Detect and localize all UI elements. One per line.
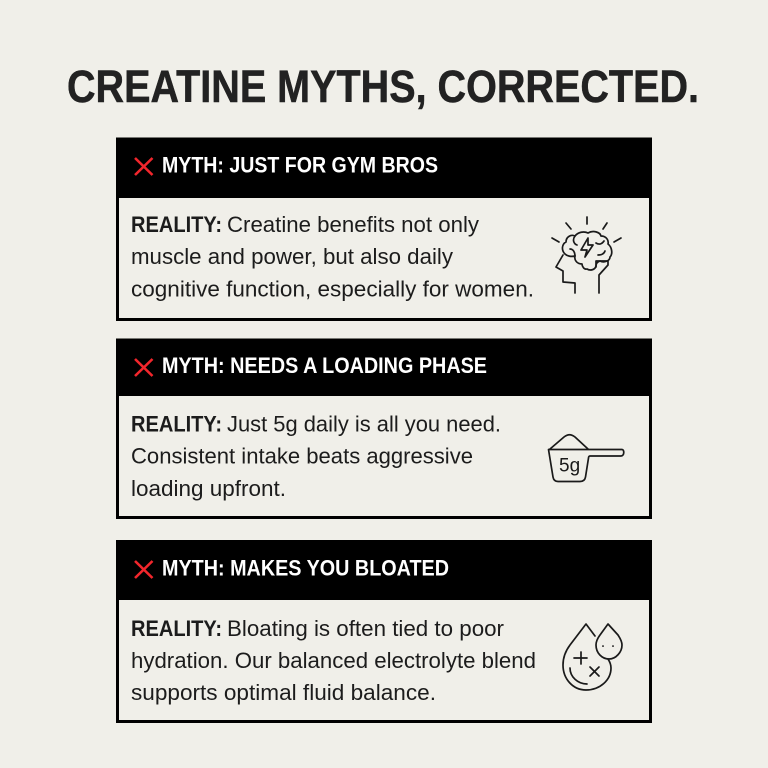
panel: myth 3 xyxy=(116,540,652,722)
panel 2 body text xyxy=(131,412,501,501)
icon: red cross 2 xyxy=(135,359,152,376)
icon: scoop with 5g: 5g xyxy=(559,456,580,476)
panel 2 body text: Just 5g daily is all you need. xyxy=(227,412,501,436)
panel 1 body text: REALITY: xyxy=(131,212,222,237)
panel 1 frame xyxy=(118,139,650,320)
panel 2 body text: loading upfront. xyxy=(131,476,286,501)
panel 2 frame xyxy=(118,340,650,518)
panel 3 body text xyxy=(131,616,536,705)
panel 3 header bar xyxy=(116,540,652,600)
panel 3 frame xyxy=(118,542,650,722)
panel 2 header bar xyxy=(116,339,652,396)
panel 1 body text xyxy=(131,212,534,302)
panel 3 body text: hydration. Our balanced electrolyte blend xyxy=(131,648,536,673)
panel 2 heading: MYTH: NEEDS A LOADING PHASE xyxy=(162,353,487,378)
panel 3 body text: Bloating is often tied to poor xyxy=(227,616,504,641)
panel 1 header bar xyxy=(116,138,652,198)
title: CREATINE MYTHS, CORRECTED. xyxy=(67,61,699,112)
panel: myth 1 xyxy=(116,138,652,320)
icon: red cross 3 xyxy=(135,561,152,578)
panel 1 body text: Creatine benefits not only xyxy=(227,212,480,237)
icon: water drops xyxy=(563,624,622,690)
panel: myth 2 xyxy=(116,339,652,518)
panel 3 body text: REALITY: xyxy=(131,616,222,641)
panel 1 heading: MYTH: JUST FOR GYM BROS xyxy=(162,152,438,178)
icon: red cross 1 xyxy=(135,158,152,175)
panel 2 body text: REALITY: xyxy=(131,412,222,436)
panel 3 heading: MYTH: MAKES YOU BLOATED xyxy=(162,556,449,580)
panel 1 body text: cognitive function, especially for women. xyxy=(131,276,534,302)
icon: scoop with 5g xyxy=(548,435,624,482)
panel 2 body text: Consistent intake beats aggressive xyxy=(131,444,473,468)
panel 3 body text: supports optimal fluid balance. xyxy=(131,680,436,705)
panel 1 body text: muscle and power, but also daily xyxy=(131,244,454,269)
icon: brain with lightning bolt xyxy=(552,217,621,293)
